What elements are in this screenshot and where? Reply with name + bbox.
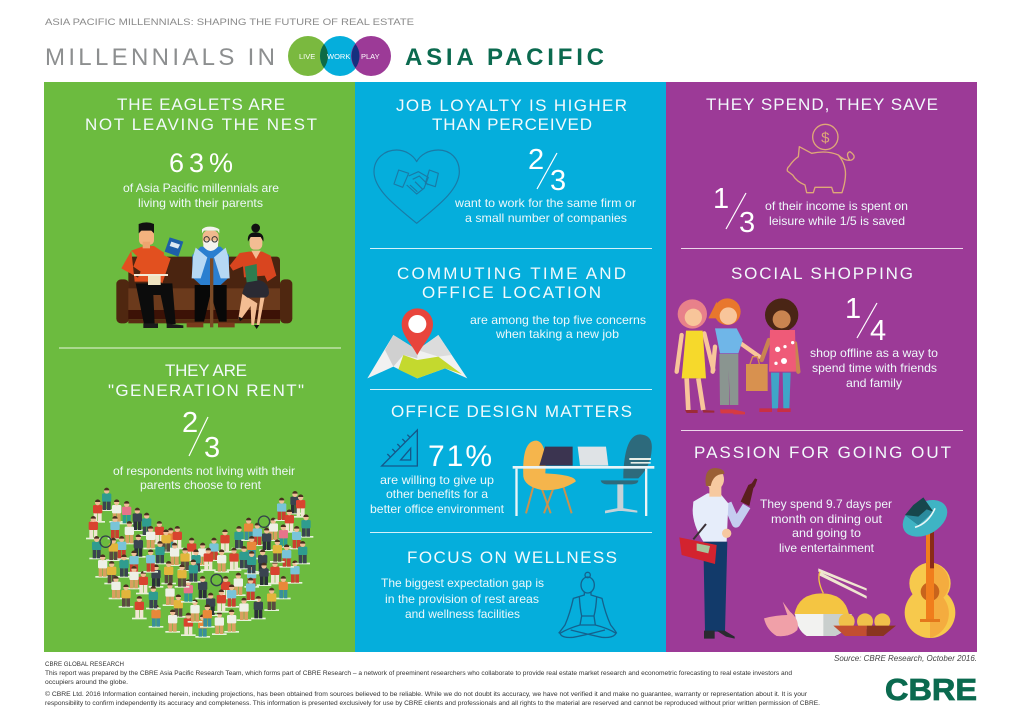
text: expectation gap: in the provision of rest areas <box>385 592 539 606</box>
heading: job loyalty <box>396 96 627 134</box>
heading: commuting: COMMUTING TIME AND <box>397 264 626 283</box>
icon: map with pin <box>367 308 467 378</box>
stat: two thirds: 3 <box>550 165 566 197</box>
illustration: noodles and shrimp <box>764 568 896 636</box>
heading: generation rent: "GENERATION RENT" <box>108 381 304 400</box>
footer text <box>45 661 820 707</box>
text: dining out: and going to <box>792 526 861 540</box>
text: shop offline: spend time with friends <box>812 361 937 375</box>
panel: blue work <box>355 82 666 652</box>
panel: green live <box>44 82 355 652</box>
stat: one quarter: 4 <box>870 315 886 347</box>
icon: yoga figure <box>559 572 617 637</box>
text: dining out: month on dining out <box>771 512 883 526</box>
footer text: occupiers around the globe. <box>45 679 128 686</box>
illustration: guitar and hat <box>896 492 955 638</box>
stat: one third: 1 <box>713 183 729 215</box>
text: same firm: a small number of companies <box>465 211 627 225</box>
stat: one third: 3 <box>739 207 755 239</box>
heading: generation rent: THEY ARE <box>165 361 247 380</box>
stat: 63%: 63% <box>169 148 233 178</box>
text: expectation gap: and wellness facilities <box>405 607 520 621</box>
icon: heart with handshake <box>374 150 459 223</box>
divider <box>681 430 963 431</box>
panel: purple play <box>666 82 977 652</box>
text: leisure <box>765 199 908 228</box>
icon: piggy bank with coin: $ <box>821 129 830 146</box>
text: expectation gap <box>381 576 544 621</box>
text: same firm: want to work for the same firm or <box>454 196 636 210</box>
text: living with parents: living with their parents <box>138 196 263 210</box>
footer text: © CBRE Ltd. 2016 Information contained herein, including projections, has been obtained from sources believed to be reliable. While we do not doubt its accuracy, we have not verified it and make no guarantee, warranty or representation about it. It is your <box>45 690 808 698</box>
heading: generation rent <box>108 361 304 400</box>
illustration: man with basket and wine <box>679 468 757 639</box>
stat: one quarter <box>845 293 886 347</box>
stat: two thirds <box>528 144 566 197</box>
logo: live work play circles <box>288 36 391 76</box>
text: office environment <box>370 473 505 516</box>
text: top five concerns: when taking a new job <box>495 327 619 341</box>
text: choose to rent <box>113 464 295 492</box>
text: top five concerns: are among the top five concerns <box>470 313 646 327</box>
illustration: three friends shopping <box>677 298 798 414</box>
heading: wellness: FOCUS ON WELLNESS <box>407 548 617 567</box>
text: living with parents <box>123 181 279 210</box>
footer text: This report was prepared by the CBRE Asia Pacific Research Team, which forms part of CBRE Research – a network of preeminent researchers who collaborate to provide real estate market research and econometric forecasting to real estate investors and <box>45 670 792 677</box>
heading: going out: PASSION FOR GOING OUT <box>694 443 951 462</box>
icon: piggy bank with coin <box>787 124 854 193</box>
heading: the eaglets: NOT LEAVING THE NEST <box>85 115 317 134</box>
heading: commuting <box>397 264 626 302</box>
heading: job loyalty: JOB LOYALTY IS HIGHER <box>396 96 627 115</box>
text: office environment: are willing to give up <box>380 473 494 487</box>
source note: Source: CBRE Research, October 2016. <box>834 654 977 663</box>
text: office environment: other benefits for a <box>386 487 488 501</box>
divider <box>681 248 963 249</box>
text: dining out <box>760 497 892 555</box>
text: choose to rent: parents choose to rent <box>140 478 262 492</box>
stat: one quarter: 1 <box>845 293 861 325</box>
text: choose to rent: of respondents not living with their <box>113 464 295 478</box>
text: living with parents: of Asia Pacific millennials are <box>123 181 279 195</box>
heading: commuting: OFFICE LOCATION <box>422 283 601 302</box>
stat: two thirds: 2 <box>182 407 198 439</box>
logo: live work play circles: WORK <box>327 52 350 61</box>
stat: two thirds: 3 <box>204 432 220 464</box>
text: shop offline: and family <box>846 376 902 390</box>
stat: two thirds: 2 <box>528 144 544 176</box>
footer text: CBRE GLOBAL RESEARCH <box>45 661 124 668</box>
heading: social shopping: SOCIAL SHOPPING <box>731 264 913 283</box>
illustration: crowd forming a heart <box>86 488 313 638</box>
stat: 71%: 71% <box>428 440 492 473</box>
illustration: three people on a sofa <box>116 222 292 329</box>
stat: one third <box>713 183 755 239</box>
heading: spend and save: THEY SPEND, THEY SAVE <box>706 95 938 114</box>
supertitle: ASIA PACIFIC MILLENNIALS: SHAPING THE FUTURE OF REAL ESTATE <box>45 17 414 28</box>
text: leisure: of their income is spent on <box>765 199 908 213</box>
footer text: responsibility to confirm independently its accuracy and completeness. This information is presented exclusively for use by CBRE clients and professionals and all rights to the material are reserved and cannot be reproduced without prior written permission of CBRE. <box>45 700 820 707</box>
text: office environment: better office environment <box>370 502 505 516</box>
heading: job loyalty: THAN PERCEIVED <box>432 115 592 134</box>
text: dining out: live entertainment <box>779 541 875 555</box>
divider <box>370 389 652 390</box>
stat: two thirds <box>182 407 220 464</box>
divider <box>59 348 341 349</box>
divider <box>370 532 652 533</box>
divider <box>370 248 652 249</box>
text: shop offline: shop offline as a way to <box>810 346 938 360</box>
logo: live work play circles: LIVE <box>299 52 315 61</box>
heading: the eaglets <box>85 95 317 134</box>
title: millennials in: MILLENNIALS IN <box>45 44 275 71</box>
heading: office design: OFFICE DESIGN MATTERS <box>391 402 632 421</box>
text: dining out: They spend 9.7 days per <box>760 497 892 511</box>
logo: live work play circles: PLAY <box>361 52 380 61</box>
text: leisure: leisure while 1/5 is saved <box>769 214 905 228</box>
text: expectation gap: The biggest expectation gap is <box>381 576 544 590</box>
illustration: office desk and chairs <box>513 434 654 516</box>
icon: set square <box>382 430 417 466</box>
title: asia pacific: ASIA PACIFIC <box>405 44 604 71</box>
heading: the eaglets: THE EAGLETS ARE <box>117 95 285 114</box>
text: shop offline <box>810 346 938 390</box>
logo: CBRE: CBRE <box>885 672 977 707</box>
text: top five concerns <box>470 313 646 341</box>
text: same firm <box>454 196 636 225</box>
